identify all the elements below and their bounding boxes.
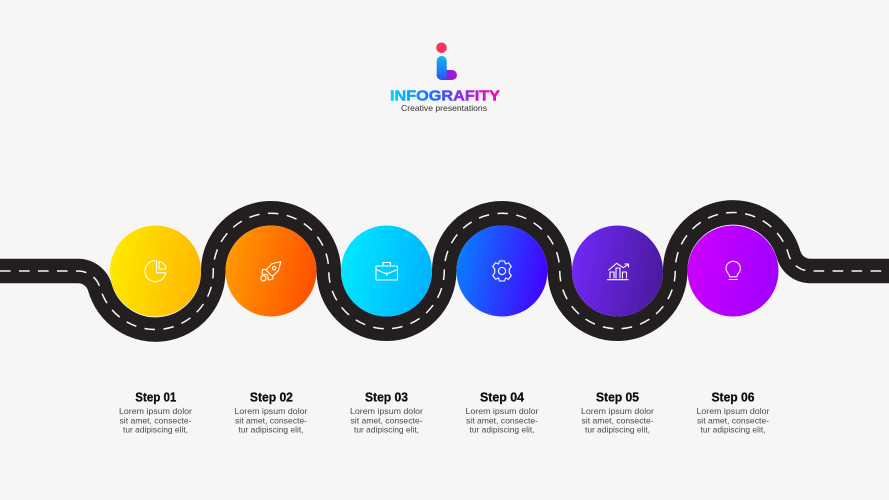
- icon: logo mark: [436, 42, 452, 75]
- winding road: [0, 212, 889, 330]
- logo tagline: Creative presentations: [401, 104, 487, 113]
- step 5 text: sit amet, consecte-: [582, 416, 654, 425]
- step 4 text: Lorem ipsum dolor: [466, 407, 539, 416]
- step 6 text: [696, 390, 770, 434]
- step 2 text: [234, 390, 308, 434]
- step 2 text: Step 02: [250, 390, 293, 404]
- icon: briefcase: [376, 262, 398, 280]
- icon: pie chart: [145, 261, 166, 282]
- step 5 text: tur adipiscing elit,: [585, 426, 650, 434]
- step 4 text: tur adipiscing elit,: [470, 426, 534, 434]
- step 3 text: sit amet, consecte-: [350, 416, 423, 425]
- step 1 text: Lorem ipsum dolor: [119, 407, 192, 416]
- step 6 text: Step 06: [712, 390, 755, 404]
- step 4 text: sit amet, consecte-: [466, 416, 538, 425]
- step 1 text: [119, 390, 192, 434]
- step 6 text: sit amet, consecte-: [697, 416, 769, 425]
- road surface: [0, 212, 889, 330]
- logo: Infografity: [390, 42, 500, 113]
- icon: growth chart: [608, 263, 628, 280]
- step 3 text: Lorem ipsum dolor: [350, 407, 423, 416]
- logo wordmark: INFOGRAFITY: [390, 88, 500, 104]
- step 5 text: Lorem ipsum dolor: [581, 407, 654, 416]
- step 4 text: [466, 390, 539, 434]
- road centre dashes: [0, 212, 889, 330]
- step 5 circle with growth chart icon: [572, 226, 663, 316]
- step 1 text: Step 01: [135, 390, 176, 404]
- step 2 text: Lorem ipsum dolor: [234, 407, 308, 416]
- step 6 text: Lorem ipsum dolor: [696, 407, 770, 416]
- step 4 text: Step 04: [480, 390, 524, 404]
- step 1 text: tur adipiscing elit,: [123, 426, 188, 434]
- step 3 text: Step 03: [365, 390, 408, 404]
- step 1 circle with pie chart icon: [110, 226, 201, 316]
- step 1 text: sit amet, consecte-: [120, 416, 192, 425]
- step 3 text: tur adipiscing elit,: [354, 426, 419, 434]
- step 5 text: [581, 390, 654, 434]
- icon: gear: [493, 261, 511, 281]
- step 6 circle with light bulb icon: [688, 226, 778, 316]
- step 2 text: tur adipiscing elit,: [238, 426, 304, 434]
- icon: light bulb: [726, 261, 740, 280]
- step 4 circle with gear icon: [456, 226, 548, 316]
- step 3 circle with briefcase icon: [341, 226, 432, 316]
- step 2 text: sit amet, consecte-: [235, 416, 307, 425]
- icon: rocket: [261, 262, 281, 281]
- step 6 text: tur adipiscing elit,: [700, 426, 766, 434]
- step 2 circle with rocket icon: [226, 226, 316, 316]
- step 3 text: [350, 390, 423, 434]
- step 5 text: Step 05: [596, 390, 639, 404]
